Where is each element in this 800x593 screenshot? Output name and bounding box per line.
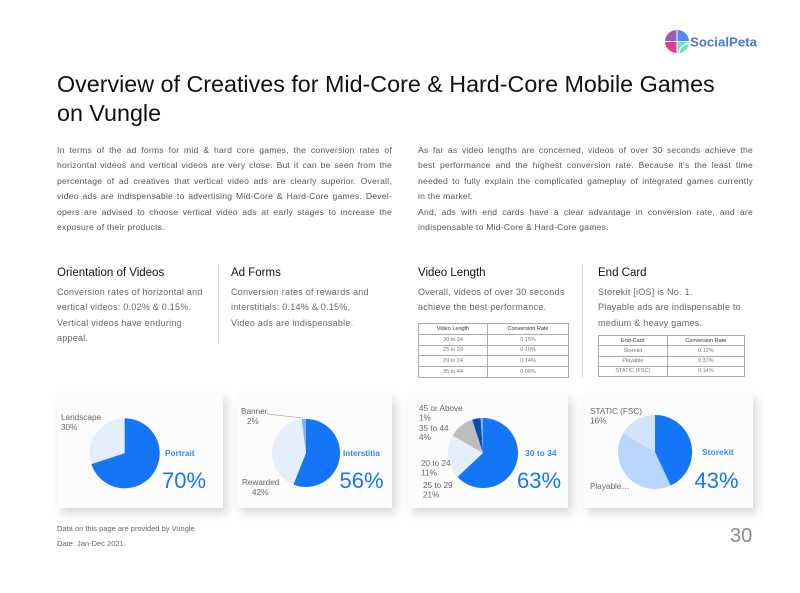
- section: Video Length: [418, 267, 569, 378]
- pie: video length: [419, 404, 561, 500]
- pie: ad forms: Banner: [241, 407, 268, 416]
- pie: ad forms: Interstitia: [343, 449, 380, 458]
- pie: video length: 25 to 29: [423, 481, 453, 490]
- table: end card conversion: Storekit: [623, 348, 642, 354]
- title: on Vungle: [57, 100, 161, 126]
- pie: video length: 35 to 44: [419, 424, 449, 433]
- table: end card conversion: STATIC (FSC): [615, 368, 650, 374]
- section: Orientation of Videos: [57, 267, 203, 343]
- text block: left intro: percentage of ad creatives that vertical video ads are clearly superior. Overall,: [57, 176, 392, 186]
- text block: left intro: [57, 145, 392, 232]
- title: [57, 70, 715, 126]
- table: video length conversion: Conversion Rate: [508, 326, 548, 332]
- section: Orientation of Videos: appeal.: [57, 333, 88, 343]
- pie: video length: 1%: [419, 414, 431, 422]
- page number: 30: [730, 525, 752, 547]
- pie: video length: 30 to 34: [525, 448, 557, 458]
- pie: video length: 21%: [423, 490, 439, 500]
- section: Ad Forms: interstitials: 0.14% & 0.15%.: [231, 302, 350, 312]
- table: video length conversion: 20 to 24: [443, 358, 463, 364]
- card: end card pie chart: [583, 394, 753, 508]
- section: Ad Forms: Conversion rates of rewards and: [231, 287, 369, 297]
- table: video length conversion: 30 to 34: [443, 337, 463, 343]
- footnote: Date: Jan-Dec 2021.: [57, 538, 126, 548]
- section: End Card: Playable ads are indispensable to: [598, 302, 741, 312]
- section: Ad Forms: [231, 267, 369, 328]
- table: end card conversion: Conversion Rate: [685, 338, 726, 344]
- pie: end card: Storekit: [702, 447, 734, 457]
- table: video length conversion: 0.14%: [520, 358, 536, 364]
- section: Video Length: Video Length: [418, 267, 486, 279]
- table: video length conversion: [418, 323, 569, 378]
- table: end card conversion: [598, 335, 745, 377]
- pie: ad forms: 2%: [247, 417, 259, 426]
- text block: right intro: And, ads with end cards have a clear advantage in conversion rate, and are: [418, 207, 753, 217]
- table: end card conversion: 0.14%: [698, 368, 714, 374]
- section: Ad Forms: Video ads are indispensable.: [231, 318, 353, 328]
- section: Orientation of Videos: Orientation of Videos: [57, 267, 164, 279]
- pie: video length: 4%: [419, 433, 431, 442]
- pie: end card: STATIC (FSC): [590, 407, 642, 416]
- table: video length conversion: 0.06%: [520, 369, 536, 375]
- section: Orientation of Videos: vertical videos: 0.02% & 0.15%.: [57, 302, 191, 312]
- logo: SocialPeta: [665, 30, 758, 54]
- pie: ad forms: Rewarded: [242, 478, 280, 487]
- text block: left intro: video ads are indispensable to advertising Mid-Core & Hard-Core games. Devel-: [57, 191, 392, 201]
- text block: left intro: opers are advised to choose vertical video ads at early stages to increase the: [57, 207, 392, 217]
- section: Video Length: achieve the best performance.: [418, 302, 546, 312]
- pie: video length: 11%: [421, 468, 437, 478]
- pie: orientation: Landscape: [61, 413, 102, 422]
- card: orientation pie chart: [57, 394, 223, 508]
- pie: video length: 63%: [517, 468, 561, 493]
- text block: right intro: best performance and the highest conversion rate. Because it's the least time: [418, 160, 753, 170]
- table: video length conversion: Video Length: [437, 326, 469, 332]
- section: End Card: [598, 267, 745, 377]
- pie: ad forms: [241, 407, 384, 497]
- section: End Card: End Card: [598, 267, 647, 279]
- section: End Card: medium & heavy games.: [598, 318, 702, 328]
- table: video length conversion: 0.10%: [520, 347, 536, 353]
- table: video length conversion: 35 to 44: [443, 369, 463, 375]
- table: video length conversion: 0.15%: [520, 337, 536, 343]
- table: end card conversion: Playable: [622, 358, 643, 364]
- pie: orientation: [61, 413, 206, 493]
- pie: end card: Playable…: [590, 482, 630, 491]
- pie: video length: 20 to 24: [421, 459, 451, 468]
- section: Orientation of Videos: Vertical videos have enduring: [57, 318, 182, 328]
- section: Video Length: Overall, videos of over 30 seconds: [418, 287, 565, 297]
- card: video length pie chart: [408, 394, 568, 508]
- text block: left intro: exposure of their products.: [57, 222, 165, 232]
- section: Orientation of Videos: Conversion rates of horizontal and: [57, 287, 203, 297]
- pie: video length: 45 or Above: [419, 404, 463, 413]
- pie: ad forms: 56%: [340, 468, 384, 493]
- text block: left intro: horizontal videos and vertical videos are very close. But it can be seen from the: [57, 160, 392, 170]
- footnote: Data on this page are provided by Vungle: [57, 524, 195, 533]
- pie: end card: 43%: [694, 468, 739, 493]
- text block: right intro: indispensable to Mid-Core & Hard-Core games.: [418, 222, 609, 232]
- table: end card conversion: 0.12%: [698, 348, 714, 354]
- table: end card conversion: End-Card: [621, 338, 645, 344]
- pie: orientation: 70%: [162, 468, 206, 493]
- title: Overview of Creatives for Mid-Core & Hard-Core Mobile Games: [57, 70, 715, 96]
- footnote: [57, 524, 195, 548]
- section: End Card: Storekit [iOS] is No. 1.: [598, 287, 693, 297]
- pie: ad forms: 42%: [252, 488, 268, 497]
- text block: left intro: In terms of the ad forms for mid & hard core games, the conversion rates of: [57, 145, 392, 155]
- pie: orientation: Portrait: [165, 448, 195, 458]
- text block: right intro: [418, 145, 753, 232]
- text block: right intro: needed to fully explain the complicated gameplay of integrated games currently: [418, 176, 753, 186]
- logo: SocialPeta: SocialPeta: [690, 36, 758, 50]
- pie: end card: [590, 407, 739, 493]
- table: end card conversion: 0.37%: [698, 358, 714, 364]
- table: video length conversion: 25 to 29: [443, 347, 463, 353]
- text block: right intro: in the market.: [418, 191, 473, 201]
- pie: end card: 16%: [590, 416, 606, 426]
- card: ad forms pie chart: [237, 394, 392, 508]
- pie: orientation: 30%: [61, 423, 77, 432]
- section: Ad Forms: Ad Forms: [231, 267, 281, 279]
- text block: right intro: As far as video lengths are concerned, videos of over 30 seconds achieve the: [418, 145, 753, 155]
